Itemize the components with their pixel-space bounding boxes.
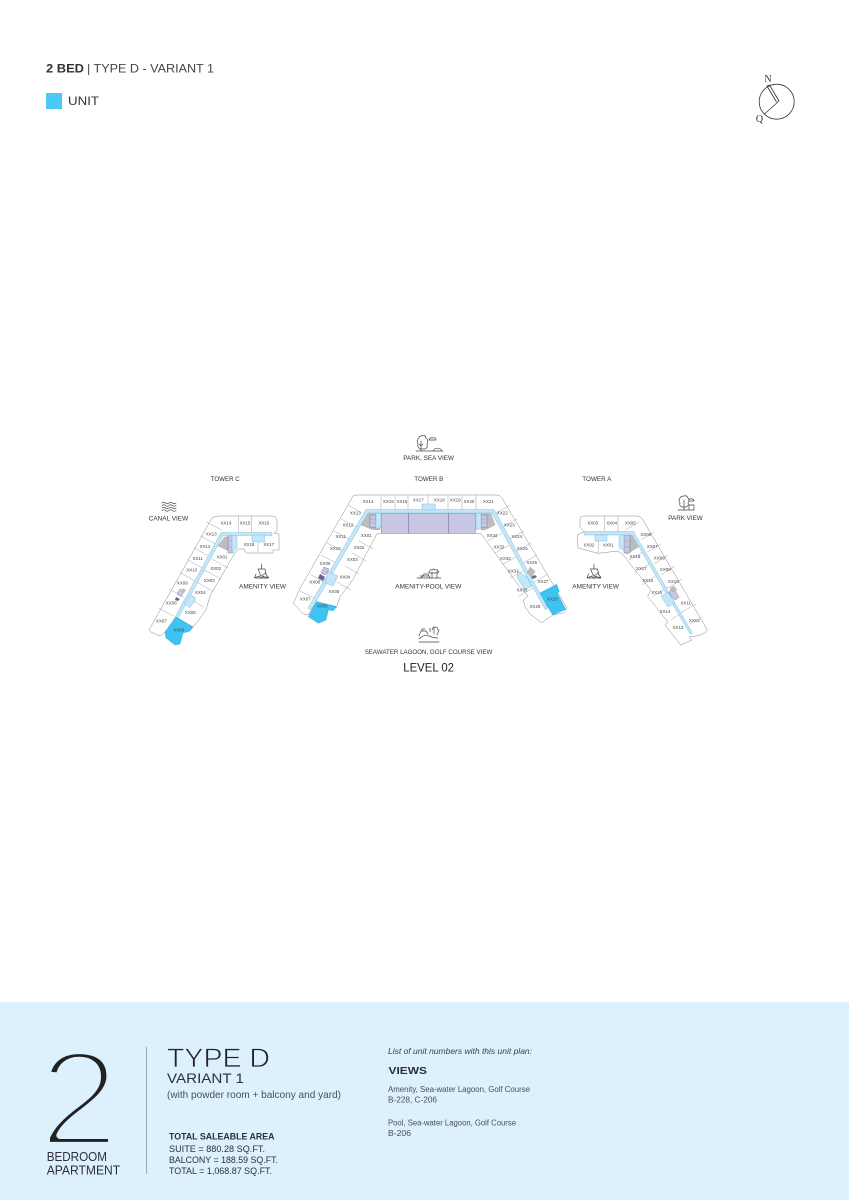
unit: B-228 highlighted xyxy=(540,584,566,615)
unit number list: B-228, C-206 xyxy=(388,1096,438,1104)
floor plan: Tower B: XX25 xyxy=(517,546,528,551)
floor plan: Tower A: XX11 xyxy=(680,600,691,606)
floor plan: Tower A: XX15 xyxy=(651,590,663,595)
unit: B-206 highlighted xyxy=(308,602,337,623)
floor plan: Tower A: XX04 xyxy=(606,520,618,526)
icon: compass: Q xyxy=(756,114,764,125)
central amenity block xyxy=(381,513,475,533)
floor plan: Tower A: XX09 xyxy=(660,567,671,572)
floor plan: Tower B: XX05 xyxy=(329,589,340,594)
floor plan: Tower B: XX32 xyxy=(500,556,511,561)
floor plan: Tower B: XX08 xyxy=(309,580,321,584)
label: Tower C: TOWER C xyxy=(211,476,240,483)
floor plan: Tower A: XX03 xyxy=(587,520,599,526)
floor plan: Tower B: XX16 xyxy=(397,499,408,504)
floor plan: Tower B: XX10 xyxy=(330,546,341,551)
floor plan: Tower A: XX08 xyxy=(654,556,665,560)
label: Tower A: TOWER A xyxy=(582,476,612,483)
floor plan: Tower C: XX01 xyxy=(217,554,228,560)
icon: amenity-pool view xyxy=(417,569,441,578)
label: bedroom apartment xyxy=(47,1150,121,1178)
floor plan: Tower B: XX22 xyxy=(497,510,508,516)
area schedule xyxy=(169,1132,278,1176)
floor plan: Tower B: XX07 xyxy=(300,596,311,602)
label: amenity view, Tower C side: AMENITY VIEW xyxy=(239,584,287,591)
floor plan: Tower A: XX18 xyxy=(630,554,641,559)
floor plan: Tower C: XX17 xyxy=(263,542,275,547)
unit number list: List of unit numbers with this unit plan: xyxy=(388,1047,532,1056)
floor plan: Tower C: XX07 xyxy=(156,618,167,624)
floor plan: Tower B: XX24 xyxy=(511,534,523,539)
floor plan: Tower B: XX11 xyxy=(335,534,346,539)
unit number list: Amenity, Sea-water Lagoon, Golf Course xyxy=(388,1085,531,1094)
floor plan: Tower B: XX01 xyxy=(361,533,372,538)
floor plan: Tower C: XX06 xyxy=(173,628,185,632)
floor plan: Tower A: XX16 xyxy=(642,578,654,583)
floor plan: Tower B: XX09 xyxy=(320,561,331,566)
floor plan: Tower B: XX33 xyxy=(494,544,505,550)
floor plan: Tower B: XX26 xyxy=(526,560,538,565)
label: park, sea view: PARK, SEA VIEW xyxy=(403,455,455,462)
note: configuration: (with powder room + balcony and yard) xyxy=(167,1089,341,1101)
floor plan: Tower A: XX14 xyxy=(660,609,671,614)
floor plan: Tower B: XX27 xyxy=(538,579,549,584)
floor plan: Tower B: XX18 xyxy=(434,498,445,502)
floor plan: Tower A: XX02 xyxy=(584,542,595,548)
floor plan: Tower C xyxy=(149,516,279,645)
floor plan: Tower B: XX15 xyxy=(383,499,394,504)
floor plan: Tower A xyxy=(577,516,707,645)
floor plan: Tower B: XX13 xyxy=(350,510,361,516)
label: seawater lagoon view: SEAWATER LAGOON, GOLF COURSE VIEW xyxy=(365,649,493,656)
floor plan: Tower B: XX21 xyxy=(483,499,494,504)
area schedule: TOTAL = 1,068.87 SQ.FT. xyxy=(169,1166,272,1176)
floor plan: Tower A: XX01 xyxy=(603,542,614,548)
icon: amenity view, Tower C side xyxy=(254,564,268,578)
floor plan: Tower B: XX04 xyxy=(340,574,351,580)
floor plan: Tower C: XX09 xyxy=(177,580,188,586)
floor plan: Tower C: XX16 xyxy=(258,520,270,526)
floor plan: Tower C: XX04 xyxy=(195,590,206,595)
floor plan: Tower B: XX23 xyxy=(504,522,515,528)
floor plan: Tower A: XX12 xyxy=(689,618,700,623)
icon: seawater lagoon, golf course view xyxy=(419,627,439,642)
floor plan: Tower B: XX12 xyxy=(343,522,354,528)
heading: plan type: 2 BED xyxy=(46,62,84,76)
label: canal view: CANAL VIEW xyxy=(149,516,189,523)
floor plan: Tower A: XX13 xyxy=(673,625,684,630)
floor plan: Tower B: XX31 xyxy=(508,568,519,574)
large numeral 2: 2 xyxy=(39,1022,119,1174)
floor plan: Tower C: XX18 xyxy=(244,542,255,547)
panel: unit summary xyxy=(0,1002,849,1200)
floor plan: Tower A: XX05 xyxy=(625,520,636,526)
floor plan: Tower B xyxy=(293,495,567,623)
label: amenity-pool view: AMENITY-POOL VIEW xyxy=(395,583,462,590)
label: amenity view, Tower A side: AMENITY VIEW xyxy=(572,584,620,591)
floor plan: Tower B: XX28 xyxy=(547,596,558,602)
label: park view: PARK VIEW xyxy=(668,515,704,522)
icon: canal view waves xyxy=(162,502,176,511)
area schedule: TOTAL SALEABLE AREA xyxy=(169,1132,275,1142)
floor plan: Tower C: XX15 xyxy=(240,520,251,526)
area schedule: BALCONY = 188.59 SQ.FT. xyxy=(169,1155,278,1165)
floor plan: Tower C: XX05 xyxy=(185,610,196,615)
unit: C-206 highlighted xyxy=(165,617,193,645)
title: type D: TYPE D xyxy=(167,1043,270,1073)
floor plan: Tower C: XX08 xyxy=(166,600,177,606)
icon: park view xyxy=(678,496,694,510)
legend: unit: UNIT xyxy=(68,94,100,108)
floor plan: Tower B: XX17 xyxy=(413,498,424,502)
floor plan: Tower B: XX06 xyxy=(317,604,328,608)
floor plan: Tower B: XX29 xyxy=(530,604,541,609)
floor plan: Tower C: XX10 xyxy=(186,568,198,572)
legend: unit xyxy=(46,93,100,109)
floor plan: Tower C: XX13 xyxy=(206,532,217,536)
unit number list: VIEWS xyxy=(388,1066,427,1077)
floor plan: Tower B: XX20 xyxy=(464,499,475,504)
icon: compass xyxy=(756,74,794,125)
icon: compass: N xyxy=(764,74,772,85)
floor plan: Tower A: XX06 xyxy=(640,532,652,537)
icon: park, sea view xyxy=(416,435,443,451)
icon: amenity view, Tower A side xyxy=(587,564,601,578)
label: bedroom apartment: APARTMENT xyxy=(47,1164,121,1178)
unit number list: B-206 xyxy=(388,1129,412,1138)
floor plan: Tower A: XX17 xyxy=(636,566,647,571)
floor plan: Tower B: XX02 xyxy=(354,545,365,550)
heading: level: LEVEL 02 xyxy=(403,661,454,675)
floor plan: Tower C: XX14 xyxy=(221,520,232,526)
label: bedroom apartment: BEDROOM xyxy=(47,1150,107,1164)
floor plan: Tower C: XX02 xyxy=(210,566,222,571)
unit number list xyxy=(388,1047,532,1138)
heading: plan type: | TYPE D - VARIANT 1 xyxy=(87,62,214,76)
unit number list: Pool, Sea-water Lagoon, Golf Course xyxy=(388,1118,517,1128)
floor plan: Tower C: XX11 xyxy=(192,556,203,561)
floor plan: Tower A: XX07 xyxy=(647,544,658,549)
floor plan: Tower A: XX10 xyxy=(668,579,679,584)
floor plan: Tower C: XX12 xyxy=(200,544,211,549)
floor plan: Tower B: XX30 xyxy=(517,588,528,592)
floor plan: Tower B: XX19 xyxy=(450,498,461,502)
area schedule: SUITE = 880.28 SQ.FT. xyxy=(169,1144,265,1154)
floor plan: Tower B: XX34 xyxy=(487,533,498,538)
floor plan: Tower C: XX03 xyxy=(204,578,215,583)
floor plan: Tower B: XX14 xyxy=(363,499,374,504)
floor plan: Tower B: XX03 xyxy=(347,557,358,562)
subtitle: variant: VARIANT 1 xyxy=(167,1070,244,1086)
label: Tower B: TOWER B xyxy=(414,476,443,483)
